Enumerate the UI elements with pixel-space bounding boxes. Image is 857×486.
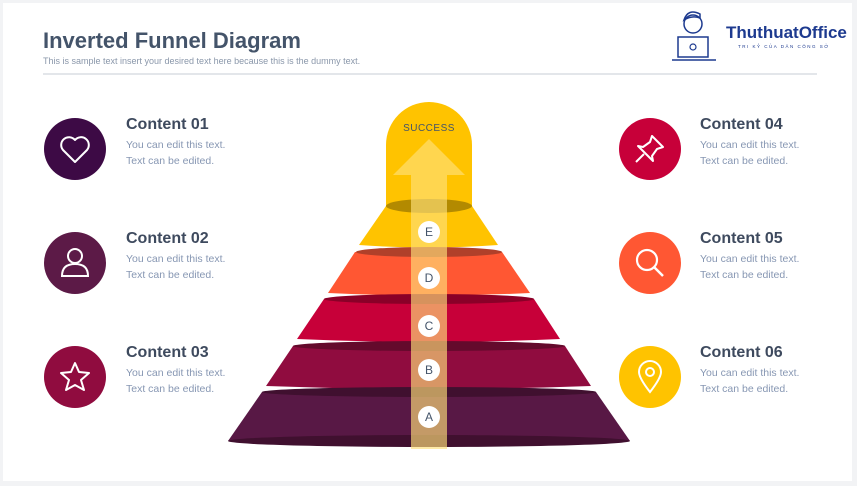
title: This is sample text insert your desired text here because this is the dummy text.: [43, 56, 360, 66]
text: content 02: Content 02: [126, 230, 209, 247]
icon: location: [619, 346, 681, 408]
layer A: [228, 387, 630, 447]
layer E: [359, 199, 498, 248]
text: content 06: Text can be edited.: [700, 383, 788, 395]
arrow: [393, 139, 465, 449]
text: content 03: [126, 344, 225, 395]
icon: star: [44, 346, 106, 408]
text: content 01: [126, 116, 225, 167]
text: content 06: You can edit this text.: [700, 367, 799, 379]
text: content 03: Text can be edited.: [126, 383, 214, 395]
text: content 04: You can edit this text.: [700, 139, 799, 151]
letter markers: D: [425, 271, 434, 285]
letter markers: E: [425, 225, 433, 239]
text: content 06: [700, 344, 799, 395]
icon: heart: [44, 118, 106, 180]
layer D: [328, 247, 530, 296]
icon: user: [44, 232, 106, 294]
letter markers: C: [425, 319, 434, 333]
title: [43, 28, 360, 66]
text: content 05: Text can be edited.: [700, 269, 788, 281]
title: Inverted Funnel Diagram: [43, 28, 301, 53]
letter markers: B: [425, 363, 433, 377]
layer C: [297, 294, 560, 342]
text: content 04: Content 04: [700, 116, 783, 133]
icon: pin: [619, 118, 681, 180]
letter markers: A: [425, 410, 433, 424]
letter markers: [418, 221, 440, 428]
text: content 01: You can edit this text.: [126, 139, 225, 151]
text: content 02: [126, 230, 225, 281]
cap: success: SUCCESS: [403, 123, 455, 134]
layer B: [266, 341, 591, 389]
text: content 03: Content 03: [126, 344, 209, 361]
cap: success: [386, 102, 472, 206]
logo: TRI KỶ CỦA DÂN CÔNG SỞ: [738, 43, 830, 49]
text: content 01: Text can be edited.: [126, 155, 214, 167]
text: content 02: You can edit this text.: [126, 253, 225, 265]
logo: [672, 12, 847, 60]
logo: ThuthuatOffice: [726, 23, 847, 42]
text: content 01: Content 01: [126, 116, 209, 133]
text: content 02: Text can be edited.: [126, 269, 214, 281]
funnel: [228, 102, 630, 449]
text: content 05: Content 05: [700, 230, 783, 247]
text: content 05: You can edit this text.: [700, 253, 799, 265]
text: content 04: Text can be edited.: [700, 155, 788, 167]
text: content 03: You can edit this text.: [126, 367, 225, 379]
text: content 05: [700, 230, 799, 281]
text: content 06: Content 06: [700, 344, 783, 361]
text: content 04: [700, 116, 799, 167]
icon: search: [619, 232, 681, 294]
